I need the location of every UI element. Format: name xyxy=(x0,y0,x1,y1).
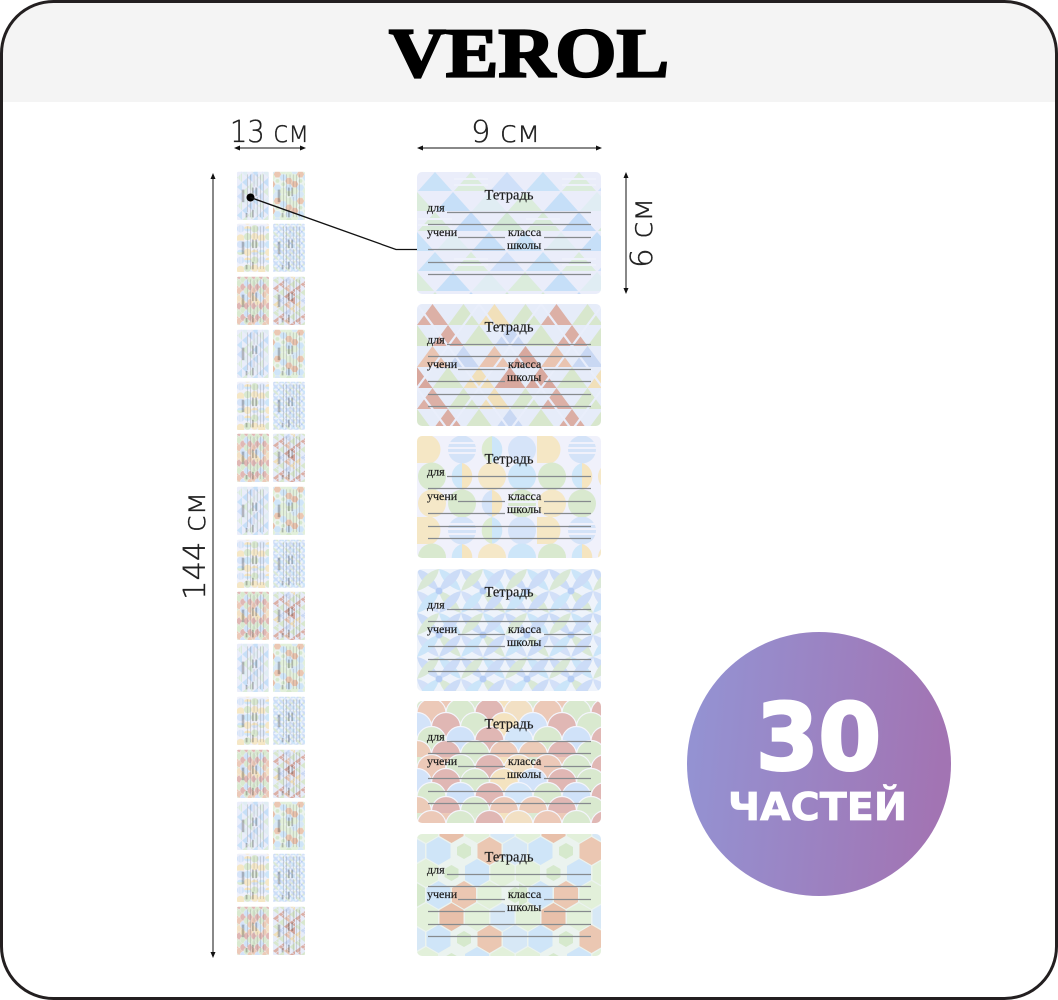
dimension: 13 cm: 13 см xyxy=(230,115,309,150)
label card 3: circles xyxy=(417,436,601,558)
label card 6: hexagons: школы xyxy=(507,900,541,914)
label card 1: triangles: класса xyxy=(508,225,542,239)
label card 3: circles: класса xyxy=(508,489,542,503)
label card 3: circles: учени xyxy=(427,489,458,503)
label card 1: triangles: Тетрадь xyxy=(485,188,534,204)
dimension: 144 cm xyxy=(178,173,216,958)
dimension: 9 cm xyxy=(417,115,602,150)
dimension: 6 cm: 6 см xyxy=(625,198,660,268)
label card 5: scales xyxy=(417,701,601,823)
label card 4: petals: Тетрадь xyxy=(485,584,534,600)
badge: 30 parts xyxy=(687,632,951,896)
leader line from thumbnail to label xyxy=(246,194,417,250)
title: VEROL logo: VEROL xyxy=(389,16,669,92)
label card 6: hexagons: для xyxy=(427,862,445,876)
dimension: 6 cm xyxy=(624,172,660,294)
label card 1: triangles xyxy=(417,172,601,294)
badge caption: ЧАСТЕЙ xyxy=(728,785,907,829)
label card 4: petals: школы xyxy=(507,635,541,649)
dimension: 9 cm: 9 см xyxy=(471,115,540,150)
label card 1: triangles: для xyxy=(427,200,445,214)
label card 6: hexagons xyxy=(417,834,601,956)
label card 4: petals: учени xyxy=(427,622,458,636)
dimension: 144 cm: 144 см xyxy=(178,492,213,600)
label card 2: diamonds: учени xyxy=(427,357,458,371)
label card 1: triangles: школы xyxy=(507,238,541,252)
label card 5: scales: класса xyxy=(508,754,542,768)
label card 1: triangles: учени xyxy=(427,225,458,239)
label card 3: circles: для xyxy=(427,464,445,478)
label card 2: diamonds: школы xyxy=(507,370,541,384)
label card 6: hexagons: класса xyxy=(508,887,542,901)
label card 2: diamonds: для xyxy=(427,332,445,346)
label card 2: diamonds: Тетрадь xyxy=(485,320,534,336)
thumbnail strip: right column xyxy=(273,172,305,955)
badge number: 30 xyxy=(756,684,881,791)
label card 5: scales: учени xyxy=(427,754,458,768)
label card 2: diamonds: класса xyxy=(508,357,542,371)
label card 4: petals xyxy=(417,569,601,691)
label card 5: scales: школы xyxy=(507,767,541,781)
label card 3: circles: школы xyxy=(507,502,541,516)
label card 5: scales: Тетрадь xyxy=(485,716,534,732)
label card 5: scales: для xyxy=(427,730,445,744)
label card 2: diamonds xyxy=(417,304,601,426)
label card 4: petals: для xyxy=(427,598,445,612)
header band xyxy=(0,0,1058,102)
label card 4: petals: класса xyxy=(508,622,542,636)
label card 6: hexagons: учени xyxy=(427,887,458,901)
thumbnail strip: left column xyxy=(237,172,269,955)
label card 3: circles: Тетрадь xyxy=(485,452,534,468)
label card 6: hexagons: Тетрадь xyxy=(485,850,534,866)
